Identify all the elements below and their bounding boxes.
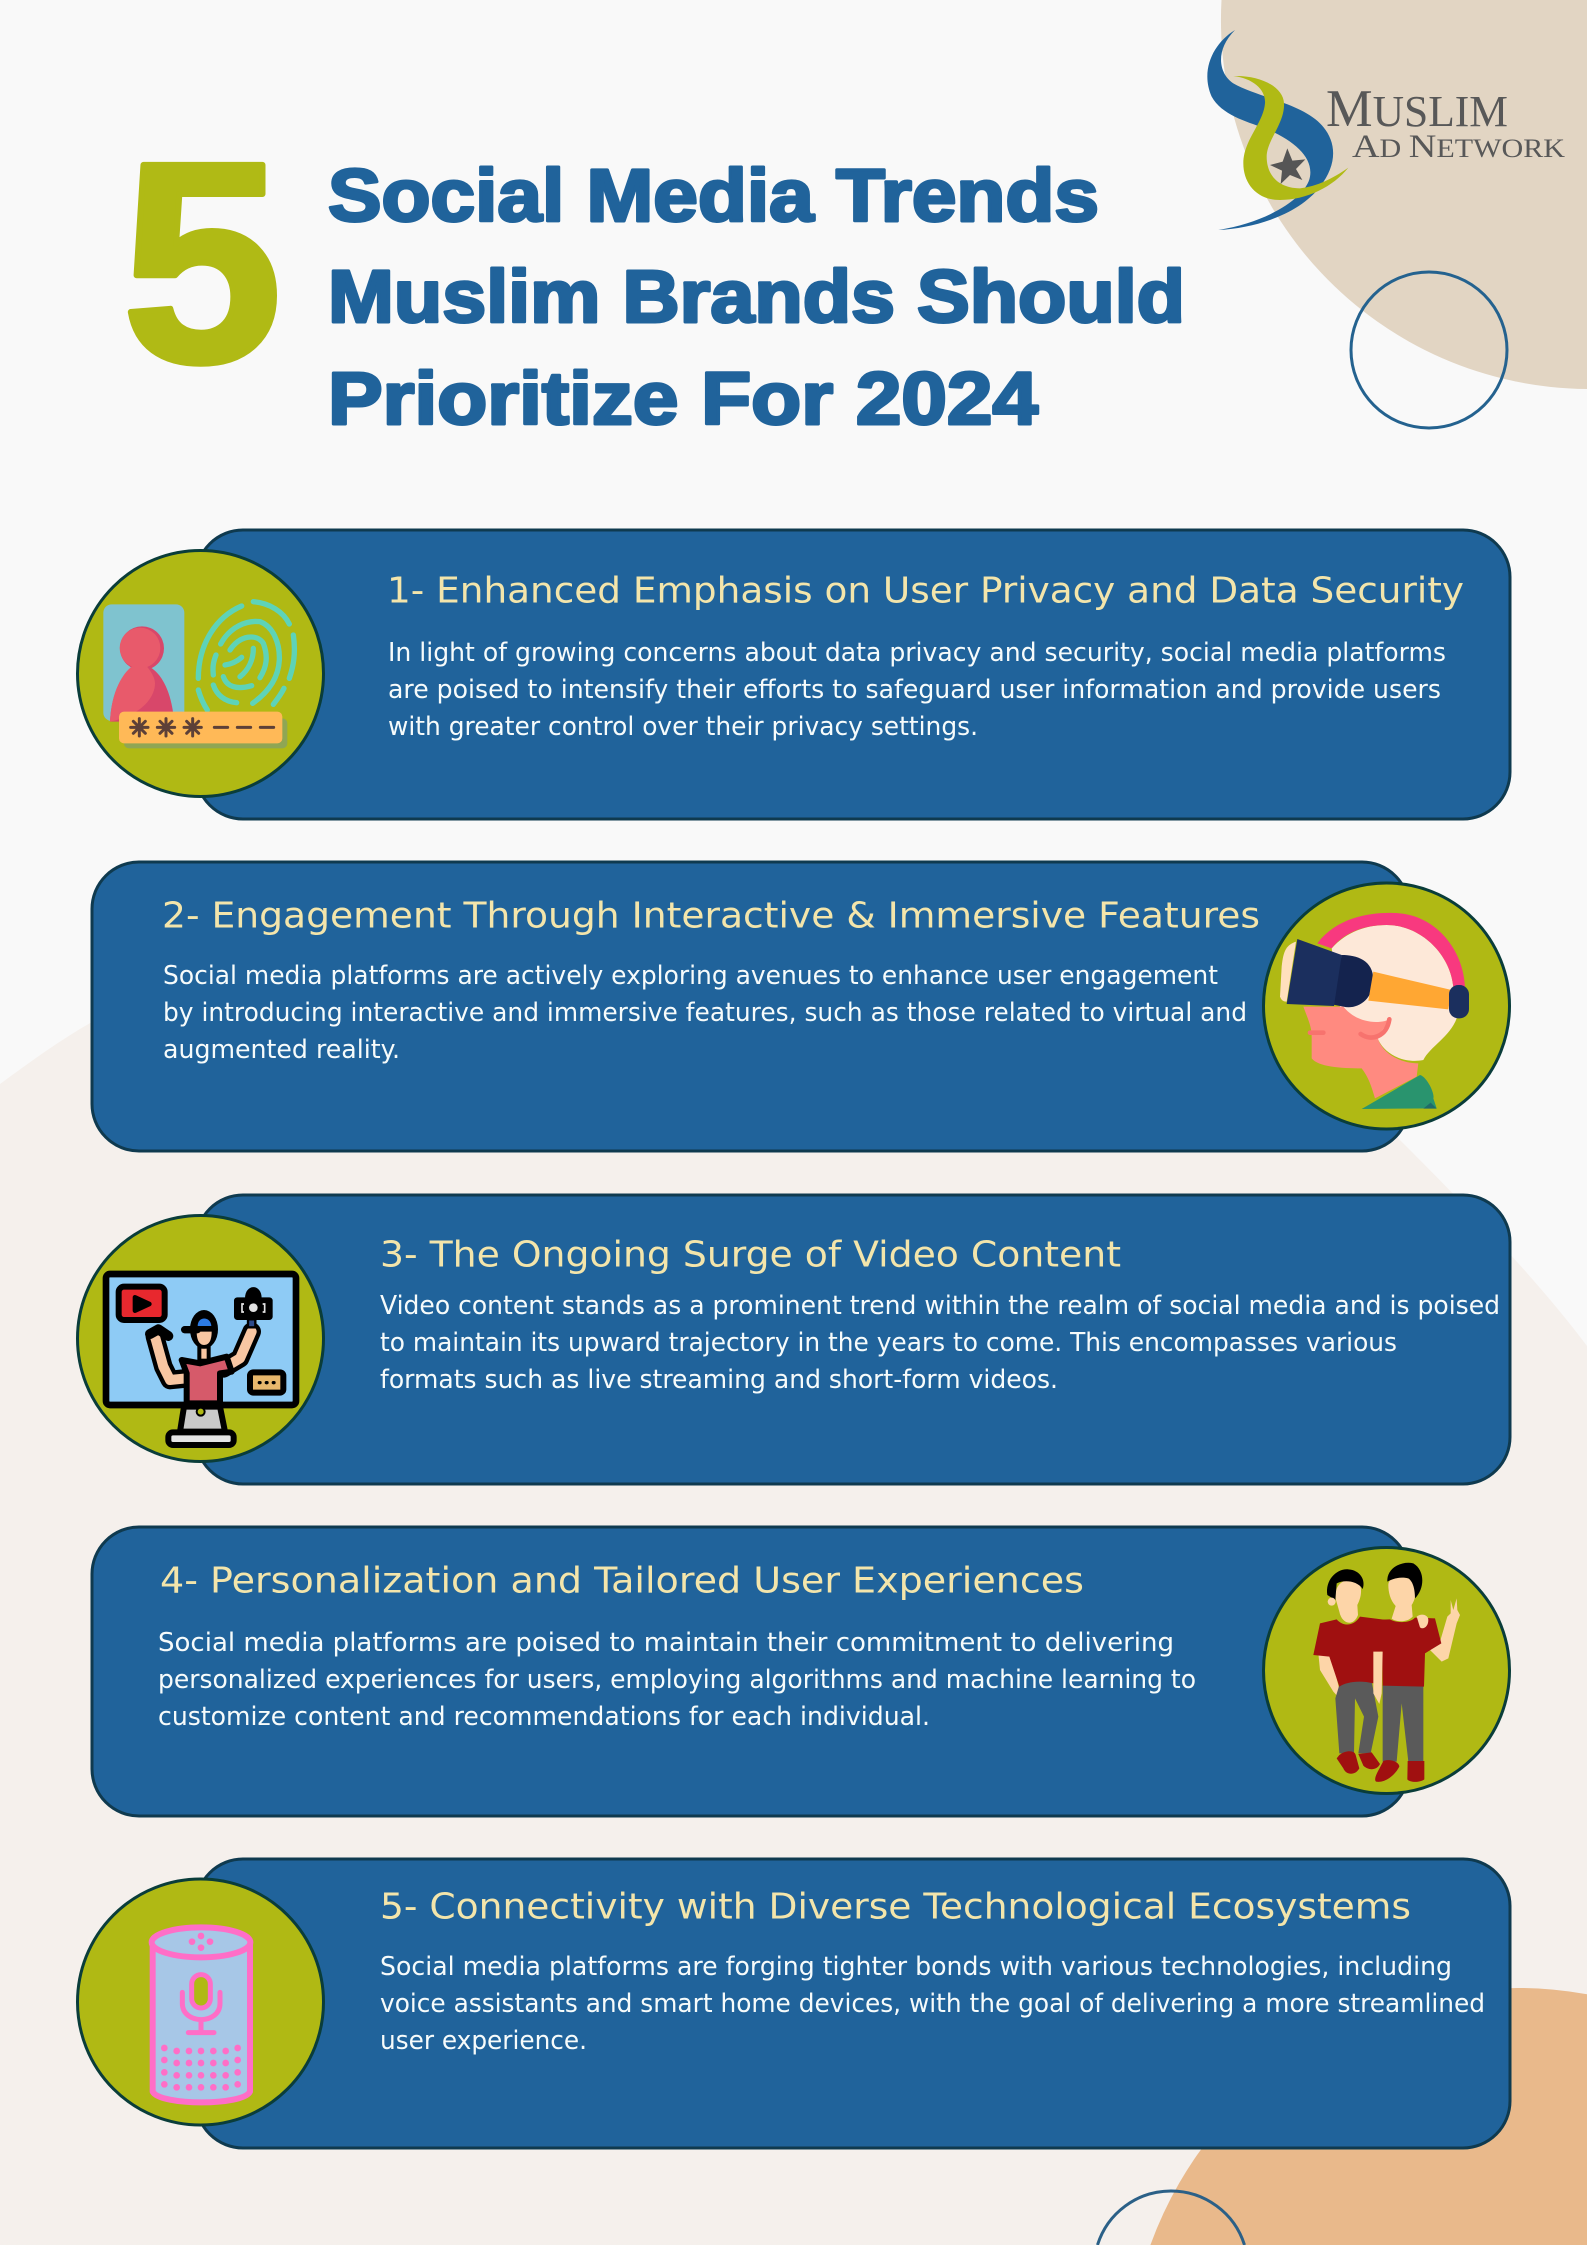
heading 4: 4- Personalization and Tailored User Experiences <box>160 1560 1084 1602</box>
heading 3: 3- The Ongoing Surge of Video Content <box>380 1234 1121 1276</box>
heading 5: 5- Connectivity with Diverse Technological Ecosystems <box>380 1886 1411 1928</box>
logo mark: ribbons and star <box>1207 30 1348 230</box>
background: beige circle top right <box>1221 0 1587 389</box>
title: Muslim Brands Should <box>328 255 1185 338</box>
panel: trend 3 video content <box>78 1195 1510 1484</box>
title: Prioritize For 2024 <box>328 357 1038 440</box>
title: Social Media Trends <box>328 154 1099 237</box>
logo wordmark line 1: MUSLIM <box>1326 80 1508 138</box>
icon: profile, fingerprint and password <box>103 602 294 748</box>
body text 4: customize content and recommendations for each individual. <box>158 1702 930 1732</box>
title <box>328 154 1185 440</box>
body text 1 <box>388 638 1446 742</box>
heading 1: 1- Enhanced Emphasis on User Privacy and Data Security <box>387 570 1464 612</box>
body text 1: are poised to intensify their efforts to safeguard user information and provide users <box>388 675 1441 705</box>
icon circle 3 <box>78 1216 324 1462</box>
body text 1: with greater control over their privacy settings. <box>388 712 978 742</box>
icon circle 1 <box>78 550 324 796</box>
card background 5 <box>196 1859 1510 2148</box>
body text 3: to maintain its upward trajectory in the years to come. This encompasses various <box>380 1328 1397 1358</box>
body text 4: Social media platforms are poised to maintain their commitment to delivering <box>158 1628 1174 1658</box>
card background 4 <box>92 1527 1409 1816</box>
body text 2 <box>163 961 1247 1065</box>
icon circle 5 <box>78 1879 324 2125</box>
body text 1: In light of growing concerns about data privacy and security, social media platforms <box>388 638 1446 668</box>
card background 1 <box>196 530 1510 819</box>
body text 3: Video content stands as a prominent trend within the realm of social media and is poised <box>380 1291 1500 1321</box>
big number 5: 5 <box>122 104 282 422</box>
body text 2: by introducing interactive and immersive features, such as those related to virtual and <box>163 998 1247 1028</box>
icon circle 2 <box>1264 883 1510 1129</box>
decoration: outline circle top right <box>1351 272 1507 428</box>
panel: trend 4 personalization <box>92 1527 1510 1816</box>
logo: Muslim Ad Network <box>1207 30 1565 230</box>
panel: trend 2 interactive features <box>92 862 1510 1151</box>
logo wordmark line 2: AD NETWORK <box>1352 129 1565 165</box>
body text 4 <box>158 1628 1196 1732</box>
body text 5: voice assistants and smart home devices, with the goal of delivering a more streamlined <box>380 1989 1485 2019</box>
decoration: outline circle bottom <box>1098 2191 1244 2245</box>
body text 2: augmented reality. <box>163 1035 400 1065</box>
body text 2: Social media platforms are actively exploring avenues to enhance user engagement <box>163 961 1218 991</box>
panel: trend 5 connectivity <box>78 1859 1510 2148</box>
icon: smart speaker with microphone <box>152 1927 250 2102</box>
body text 5: user experience. <box>380 2026 587 2056</box>
card background 2 <box>92 862 1409 1151</box>
body text 4: personalized experiences for users, employing algorithms and machine learning to <box>158 1665 1196 1695</box>
background: pale lower shape <box>0 1000 1587 2245</box>
icon: two friends <box>1313 1563 1460 1782</box>
icon: person wearing VR headset <box>1280 913 1469 1109</box>
body text 3 <box>380 1291 1500 1395</box>
heading 2: 2- Engagement Through Interactive & Immersive Features <box>162 896 1260 936</box>
body text 3: formats such as live streaming and short-form videos. <box>380 1365 1058 1395</box>
card background 3 <box>196 1195 1510 1484</box>
background: orange circle bottom right <box>1150 1988 1587 2245</box>
body text 5 <box>380 1952 1485 2056</box>
icon: video creator on monitor <box>106 1274 296 1445</box>
body text 5: Social media platforms are forging tighter bonds with various technologies, including <box>380 1952 1452 1982</box>
panel: trend 1 privacy <box>78 530 1510 819</box>
icon circle 4 <box>1264 1548 1510 1794</box>
